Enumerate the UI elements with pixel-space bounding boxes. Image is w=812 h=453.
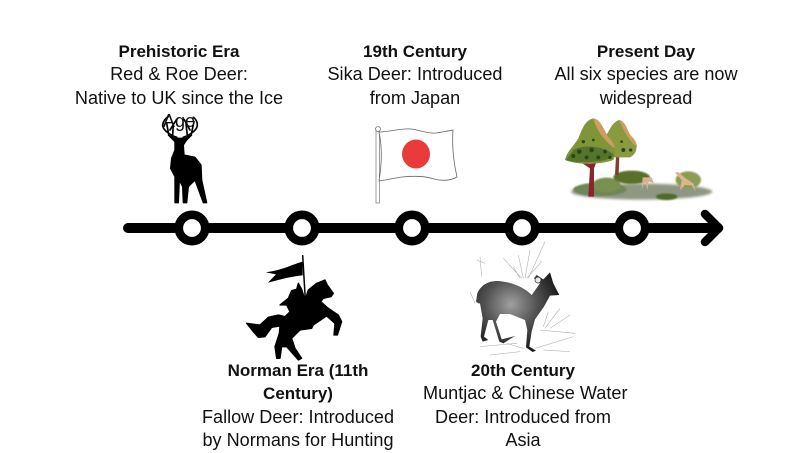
text: Norman Era [202,361,394,450]
text: Present Day: widespread [600,88,692,108]
text: Present Day [554,42,738,108]
text: 19th Century [327,42,502,108]
text: 20th Century: Muntjac & Chinese Water [423,383,627,403]
text: Prehistoric Era: Red & Roe Deer: [110,64,248,84]
text: Norman Era: by Normans for Hunting [202,430,394,450]
text: 19th Century: 19th Century [363,42,467,61]
text: 19th Century: from Japan [370,88,460,108]
text: 20th Century [423,361,628,450]
text: Norman Era: Norman Era (11th [228,361,368,380]
text: Prehistoric Era: Prehistoric Era [119,42,239,61]
text: Prehistoric Era: Native to UK since the Ice [75,88,283,108]
text: 20th Century: Asia [505,430,541,450]
text: Prehistoric Era [75,42,283,131]
text: 20th Century: Deer: Introduced from [435,407,611,427]
text: Norman Era: Century) [263,384,333,403]
text: Present Day: All six species are now [554,64,738,84]
text: Prehistoric Era: Age [163,111,195,131]
text: 19th Century: Sika Deer: Introduced [327,64,502,84]
text: Present Day: Present Day [597,42,695,61]
text: 20th Century: 20th Century [471,361,575,380]
text: Norman Era: Fallow Deer: Introduced [202,407,394,427]
